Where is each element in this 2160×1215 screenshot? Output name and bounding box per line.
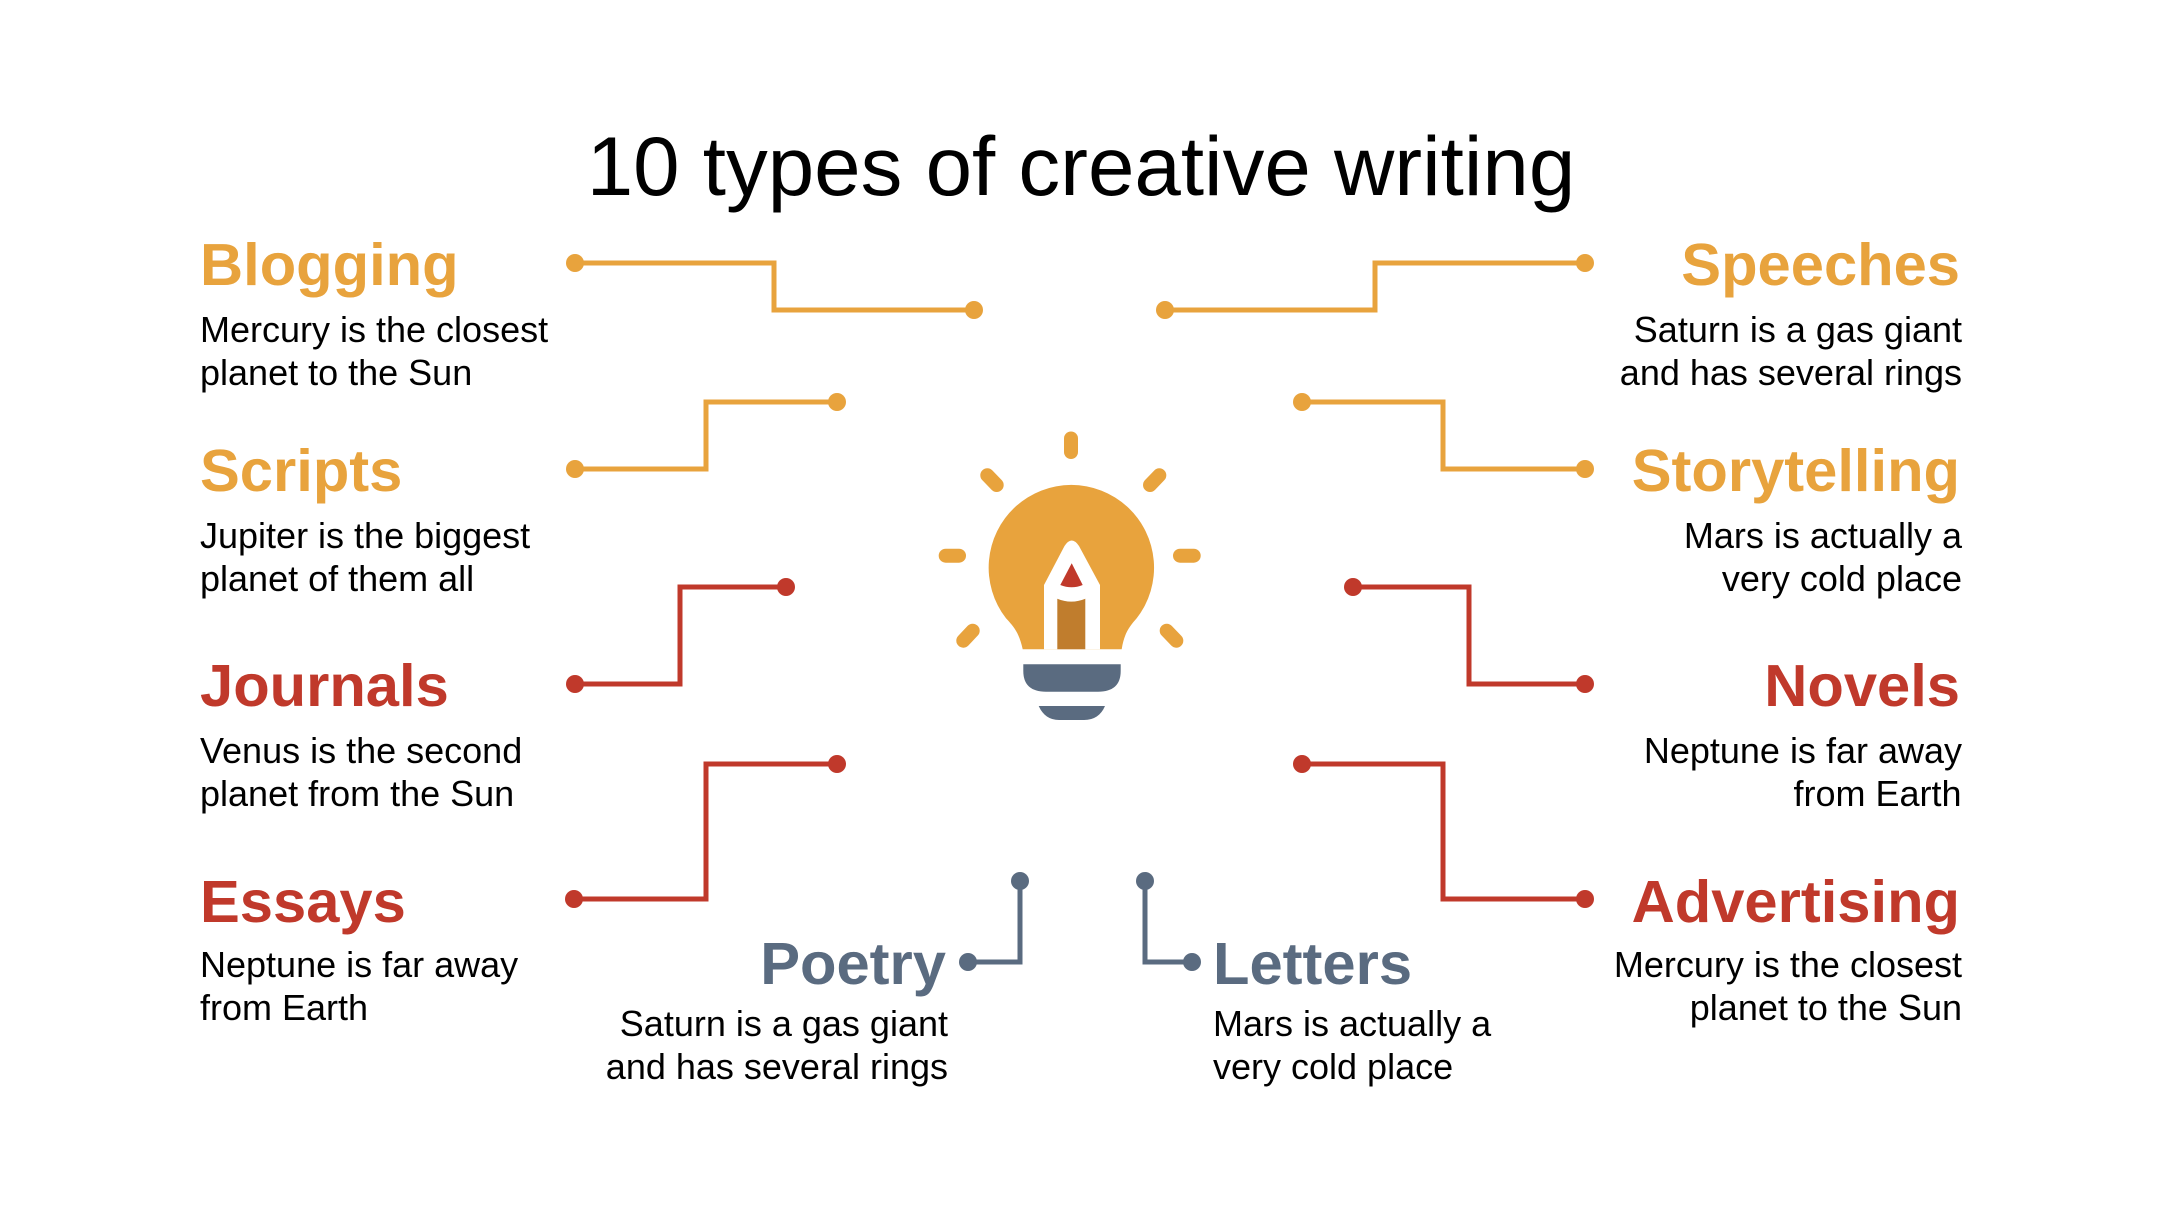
connector: Poetry (959, 872, 1029, 971)
connector: Journals (566, 578, 795, 693)
heading: Journals: Journals (200, 652, 449, 719)
connector: Advertising (1293, 755, 1594, 908)
text: Journals description: Venus is the second (200, 730, 522, 771)
text: Advertising description: Mercury is the closest (1614, 944, 1962, 985)
heading: Storytelling: Storytelling (1632, 437, 1960, 504)
panel: Speeches (1620, 231, 1962, 393)
panel: Essays (200, 868, 518, 1028)
connector: Letters (1136, 872, 1201, 971)
panel: Journals (200, 652, 522, 814)
icon: light rays (946, 438, 1194, 641)
icon: bulb base lower (1039, 706, 1105, 720)
text: Blogging description: planet to the Sun (200, 352, 472, 393)
icon: pencil shaft (1057, 599, 1085, 649)
connector: Essays (565, 755, 846, 908)
heading: Letters: Letters (1213, 930, 1412, 997)
text: Journals description: planet from the Sun (200, 773, 514, 814)
text: Blogging description: Mercury is the closest (200, 309, 548, 350)
icon: pencil body (1044, 540, 1100, 649)
title: 10 types of creative writing (587, 119, 1575, 213)
heading: Essays: Essays (200, 868, 406, 935)
icon: pencil tip (1060, 563, 1083, 587)
text: Scripts description: Jupiter is the biggest (200, 515, 530, 556)
text: Poetry description: and has several rings (606, 1046, 948, 1087)
icon: light bulb with pencil (946, 438, 1194, 720)
heading: Speeches: Speeches (1681, 231, 1960, 298)
text: Novels description: Neptune is far away (1644, 730, 1962, 771)
heading: Novels: Novels (1764, 652, 1960, 719)
panel: Advertising (1614, 868, 1962, 1028)
text: Storytelling description: Mars is actually a (1684, 515, 1963, 556)
connector: Blogging (566, 254, 983, 319)
heading: Blogging: Blogging (200, 231, 459, 298)
connector: Scripts (566, 393, 846, 478)
text: Essays description: Neptune is far away (200, 944, 518, 985)
panel: Letters (1213, 930, 1492, 1087)
heading: Advertising: Advertising (1632, 868, 1960, 935)
text: Letters description: Mars is actually a (1213, 1003, 1492, 1044)
connector: Novels (1344, 578, 1594, 693)
text: Storytelling description: very cold place (1722, 558, 1962, 599)
panel: Poetry (606, 930, 948, 1087)
panel: Novels (1644, 652, 1962, 814)
panel: Blogging (200, 231, 548, 393)
text: Advertising description: planet to the Sun (1690, 987, 1962, 1028)
icon: bulb glass (989, 485, 1154, 649)
heading: Poetry: Poetry (760, 930, 946, 997)
text: Essays description: from Earth (200, 987, 368, 1028)
text: Speeches description: Saturn is a gas giant (1634, 309, 1962, 350)
text: Speeches description: and has several rings (1620, 352, 1962, 393)
text: Poetry description: Saturn is a gas giant (620, 1003, 948, 1044)
panel: Scripts (200, 437, 530, 599)
panel: Storytelling (1632, 437, 1963, 599)
connector: Speeches (1156, 254, 1594, 319)
text: Novels description: from Earth (1793, 773, 1962, 814)
connector: Storytelling (1293, 393, 1594, 478)
text: Scripts description: planet of them all (200, 558, 474, 599)
icon: bulb base upper (1023, 664, 1121, 692)
heading: Scripts: Scripts (200, 437, 402, 504)
text: Letters description: very cold place (1213, 1046, 1453, 1087)
